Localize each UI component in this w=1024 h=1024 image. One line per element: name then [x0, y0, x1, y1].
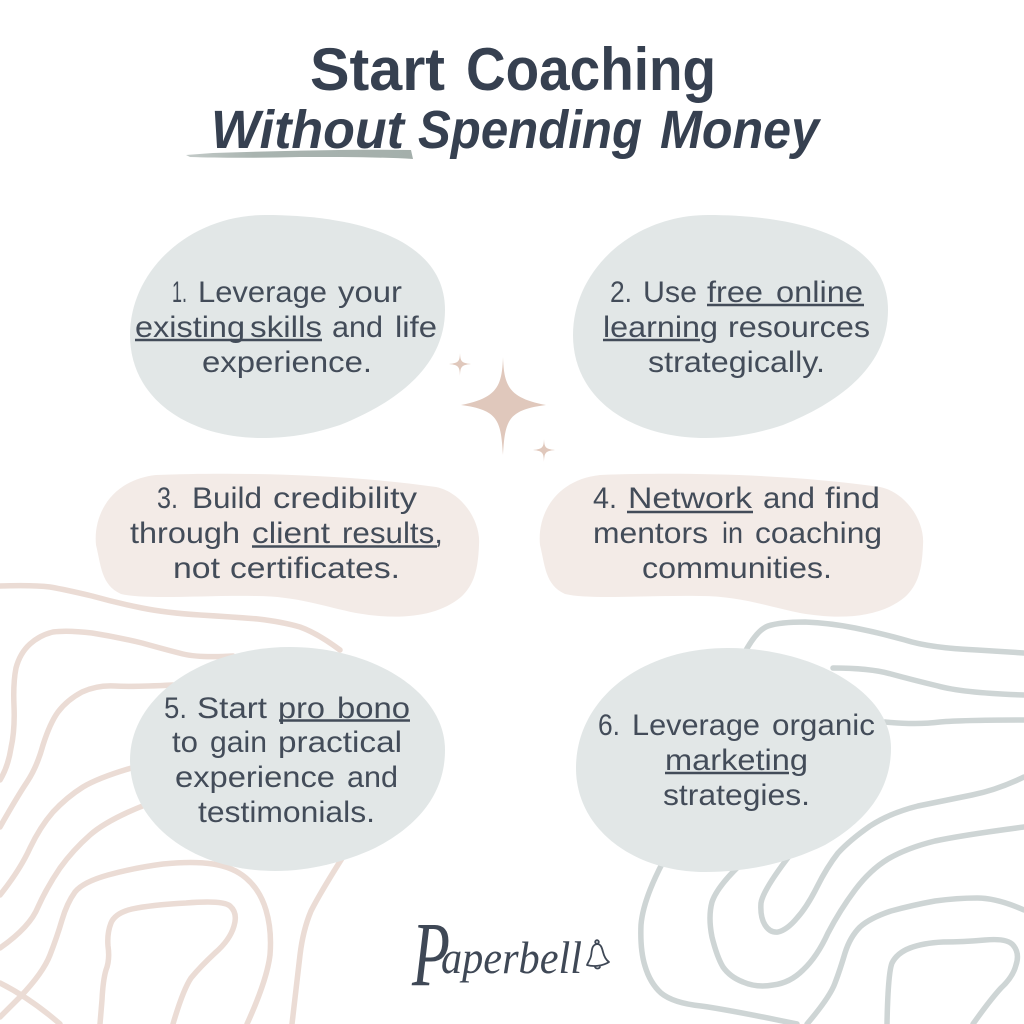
panel: step 5: 5. — [164, 692, 187, 725]
panel: step 3: credibility — [273, 482, 417, 515]
panel: step 5: experience — [175, 761, 335, 794]
panel: step 3: Build — [192, 482, 262, 515]
logo: Paperbell: P — [411, 903, 450, 1005]
panel: step 3: client — [252, 517, 331, 550]
brush underline beneath Without — [186, 150, 413, 159]
panel: step 2: learning — [603, 311, 718, 344]
panel: step 1: 1. — [172, 276, 187, 309]
panel: step 2: online — [776, 276, 863, 309]
panel: step 6: organic — [772, 709, 875, 742]
panel: step 2: resources — [728, 311, 870, 344]
panel: step 1 — [130, 215, 445, 438]
panel: step 4: find — [825, 482, 880, 515]
title: Coaching — [466, 36, 716, 103]
panel: step 1: skills — [250, 311, 322, 344]
icon: sparkles — [449, 353, 555, 462]
title: Spending — [418, 100, 642, 160]
panel: step 4: 4. — [593, 482, 617, 515]
panel: step 1: existing — [135, 311, 245, 344]
panel: step 1: and — [332, 311, 383, 344]
panel: step 5: to — [172, 726, 198, 759]
panel: step 6 — [576, 648, 891, 872]
panel: step 4: Network — [628, 482, 753, 515]
panel: step 6: Leverage — [632, 709, 760, 742]
panel: step 5: testimonials. — [198, 796, 375, 829]
panel: step 5: gain — [210, 726, 267, 759]
panel: step 3: certificates. — [230, 552, 400, 585]
panel: step 6: strategies. — [663, 779, 810, 812]
panel: step 4: in — [722, 517, 743, 550]
title: Money — [660, 100, 822, 160]
panel: step 3: not — [173, 552, 221, 585]
panel: step 4 — [540, 474, 923, 617]
panel: step 4: coaching — [755, 517, 882, 550]
logo: Paperbell — [411, 903, 609, 1005]
icon: bell — [587, 940, 609, 968]
panel: step 5: pro — [278, 692, 325, 725]
panel: step 6: marketing — [665, 744, 808, 777]
panel: step 4: communities. — [642, 552, 832, 585]
panel: step 5: bono — [337, 692, 410, 725]
panel: step 4: mentors — [593, 517, 708, 550]
panel: step 5: and — [347, 761, 398, 794]
title: Start — [310, 36, 445, 103]
panel: step 1: experience. — [202, 346, 372, 379]
panel: step 5: practical — [278, 726, 402, 759]
panel: step 3: through — [130, 517, 240, 550]
title — [211, 36, 822, 160]
panel: step 3: results, — [342, 517, 443, 550]
panel: step 2: Use — [643, 276, 697, 309]
panel: step 1: life — [395, 311, 437, 344]
panel: step 1: your — [338, 276, 402, 309]
panel: step 2: 2. — [610, 276, 632, 309]
panel: step 1: Leverage — [198, 276, 327, 309]
logo: Paperbell: aperbell — [441, 932, 582, 983]
panel: step 4: and — [763, 482, 815, 515]
panel: step 5 — [130, 647, 445, 871]
title: Without — [211, 100, 406, 160]
panel: step 3: 3. — [157, 482, 178, 515]
panel: step 5: Start — [197, 692, 268, 725]
panel: step 2: strategically. — [648, 346, 825, 379]
panel: step 2 — [573, 215, 888, 438]
panel: step 6: 6. — [598, 709, 620, 742]
background contour lines: right, grey — [641, 622, 1024, 1024]
panel: step 2: free — [707, 276, 763, 309]
background contour lines: left, peach — [0, 586, 346, 1024]
panel: step 3 — [96, 474, 479, 617]
